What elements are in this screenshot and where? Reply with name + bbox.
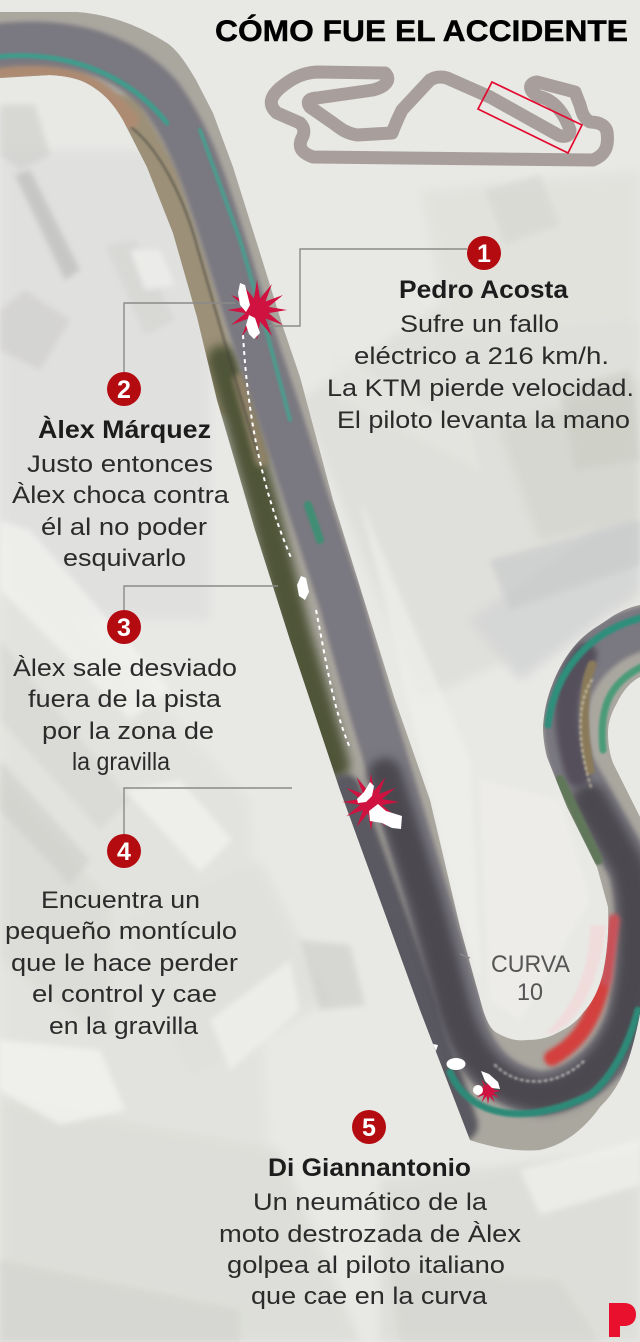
step 2: Àlex Márquez: él al no poder (41, 514, 207, 541)
step 1: Pedro Acosta (327, 236, 634, 434)
step 4: pequeño montículo (5, 918, 237, 945)
dashed trajectory (243, 335, 350, 748)
rail line (132, 128, 258, 455)
step 4: 4 (117, 838, 131, 866)
step 2: Àlex Márquez: Àlex choca contra (12, 482, 230, 509)
step 2: Àlex Márquez: 2 (117, 376, 131, 404)
step 1: Pedro Acosta: La KTM pierde velocidad. (327, 375, 634, 402)
step 5: Di Giannantonio (219, 1110, 521, 1310)
step 2: Àlex Márquez (12, 372, 230, 572)
step 5: Di Giannantonio: golpea al piloto italiano (227, 1252, 505, 1279)
step 3: Àlex sale desviado (13, 655, 237, 682)
rider on track (297, 576, 309, 600)
step 5: Di Giannantonio: Un neumático de la (253, 1189, 488, 1216)
step 4: el control y cae (32, 981, 217, 1008)
gravel and trees strip (125, 115, 222, 395)
step 3: por la zona de (42, 718, 214, 745)
step 5: Di Giannantonio: 5 (362, 1114, 376, 1142)
step 4: en la gravilla (49, 1013, 199, 1040)
step 3: 3 (117, 614, 131, 642)
step 5: Di Giannantonio: Di Giannantonio (268, 1154, 471, 1182)
step 3: fuera de la pista (28, 686, 222, 713)
step 1: Pedro Acosta: eléctrico a 216 km/h. (354, 343, 609, 370)
step 1: Pedro Acosta: Pedro Acosta (399, 276, 569, 304)
step 3: la gravilla (72, 748, 170, 776)
step 4 (5, 834, 238, 1040)
curve label: CURVA (491, 951, 570, 978)
step 1: Pedro Acosta: Sufre un fallo (400, 311, 559, 338)
step 5: Di Giannantonio: moto destrozada de Àlex (219, 1221, 521, 1248)
green kerbs (0, 56, 640, 1114)
logo (609, 1303, 636, 1337)
step 5: Di Giannantonio: que cae en la curva (251, 1283, 488, 1310)
step 1: Pedro Acosta: 1 (477, 240, 491, 268)
step 4: que le hace perder (11, 950, 238, 977)
curve label: 10 (517, 979, 543, 1006)
red painted runoff (552, 920, 614, 1058)
asphalt (0, 44, 640, 1093)
impact 1 (227, 280, 287, 340)
curve label (491, 951, 570, 1006)
step 4: Encuentra un (41, 887, 200, 914)
circuit minimap (271, 72, 607, 160)
step 3 (13, 610, 237, 776)
leader lines (124, 249, 470, 958)
impact 2 (342, 774, 402, 830)
impact 3 (433, 1044, 501, 1104)
step 2: Àlex Márquez: esquivarlo (63, 545, 186, 572)
title: CÓMO FUE EL ACCIDENTE (215, 14, 628, 48)
step 2: Àlex Márquez: Àlex Márquez (38, 415, 211, 444)
step 2: Àlex Márquez: Justo entonces (27, 451, 213, 478)
minimap highlight box (478, 82, 582, 153)
step 1: Pedro Acosta: El piloto levanta la mano (337, 407, 630, 434)
